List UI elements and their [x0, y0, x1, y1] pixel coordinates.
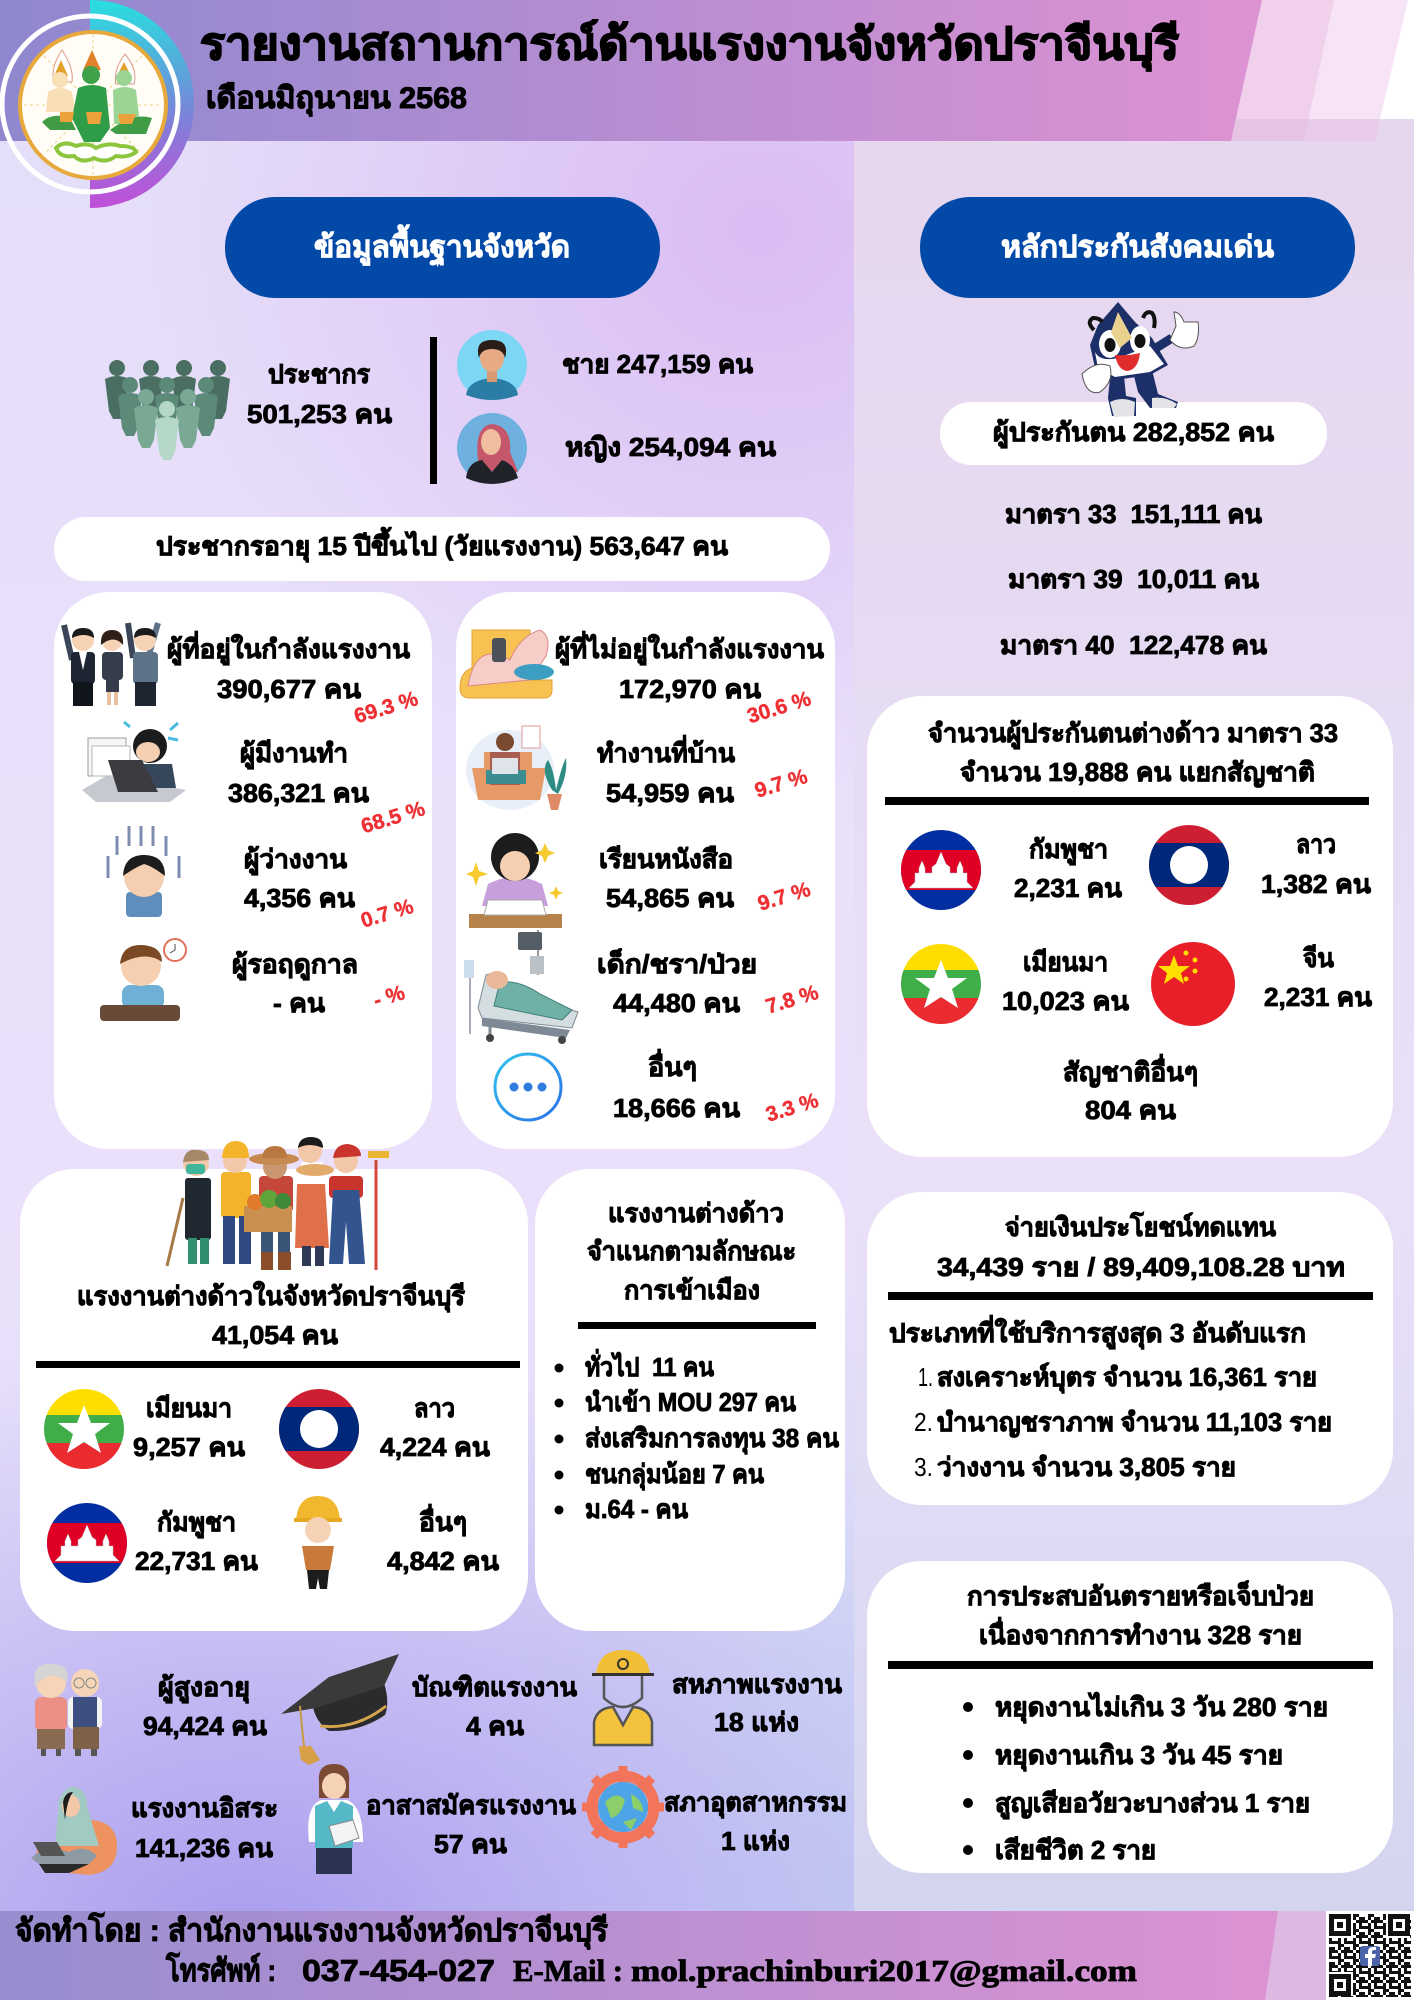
stat: labour unions: 18 แห่ง	[714, 1707, 799, 1737]
panel: compensation payouts	[867, 1192, 1393, 1505]
list: นำเข้า MOU 297 คน	[585, 1387, 796, 1417]
stat: Cambodia	[135, 1507, 258, 1576]
flag: Myanmar	[901, 944, 981, 1024]
stat: labour graduates: บัณฑิตแรงงาน	[412, 1672, 577, 1702]
stat: Laos	[1261, 829, 1371, 899]
panel: in the labour force	[54, 592, 432, 1149]
stat: outside labour force: 172,970 คน	[619, 674, 761, 704]
stat: studying	[599, 844, 734, 913]
panel: outside the labour force	[456, 592, 835, 1149]
flag: Myanmar	[44, 1389, 124, 1469]
injury list: หยุดงานไม่เกิน 3 วัน 280 ราย	[995, 1691, 1328, 1724]
population total: ประชากร	[268, 359, 370, 389]
right column background	[854, 119, 1414, 1911]
contact line: โทรศัพท์ :	[165, 1952, 276, 1988]
heading: การเข้าเมือง	[624, 1275, 760, 1305]
percent: 0.7 %	[358, 895, 416, 933]
flag: Laos	[1149, 825, 1229, 905]
stat: in labour force: ผู้ที่อยู่ในกำลังแรงงาน	[167, 630, 410, 666]
section statistics	[1000, 499, 1267, 660]
injury list	[963, 1691, 1328, 1865]
stat: child elderly sick	[597, 948, 757, 1018]
stat: unemployed: ผู้ว่างงาน	[244, 844, 347, 876]
panel: compensation payouts: จ่ายเงินประโยชน์ทดแทน	[1005, 1211, 1276, 1242]
stat: Laos: ลาว	[1296, 829, 1336, 859]
stat: labour graduates: 4 คน	[466, 1711, 524, 1741]
stat: labour unions	[672, 1669, 842, 1737]
stat: Cambodia: 22,731 คน	[135, 1546, 258, 1576]
QR code	[1326, 1911, 1414, 2000]
panel: insured migrants by nationality: จำนวนผู้ประกันตนต่างด้าว มาตรา 33	[928, 718, 1338, 750]
icon: working from home	[466, 726, 566, 810]
panel: work injuries	[867, 1561, 1393, 1873]
stat: Cambodia: 2,231 คน	[1014, 873, 1122, 903]
heading	[77, 1281, 465, 1350]
stat: Cambodia	[1014, 834, 1122, 903]
injury list: เสียชีวิต 2 ราย	[995, 1835, 1156, 1865]
population total	[247, 359, 392, 429]
stat: federation of industries: 1 แห่ง	[721, 1826, 790, 1856]
flag: Cambodia	[901, 830, 981, 910]
heading: จำแนกตามลักษณะ	[587, 1236, 796, 1266]
stat: employed	[228, 738, 369, 808]
stat: studying: 54,865 คน	[606, 883, 734, 913]
panel: social security insured pill	[940, 402, 1327, 465]
panel: migrants by entry type	[535, 1169, 845, 1631]
icon: freelancer on beanbag	[31, 1787, 117, 1875]
flag: Laos	[279, 1389, 359, 1469]
percent: - %	[371, 981, 408, 1012]
section heading pill: provincial data	[225, 197, 660, 298]
icon: three workers	[64, 623, 158, 706]
stat: elderly	[143, 1672, 267, 1741]
icon: gear and globe	[582, 1766, 664, 1848]
stat: seasonal: - คน	[273, 988, 325, 1018]
stat: other nationalities: 804 คน	[1085, 1095, 1176, 1125]
stat: labour volunteers: อาสาสมัครแรงงาน	[366, 1790, 576, 1820]
stat: working from home: 54,959 คน	[606, 778, 734, 808]
stat: others: 18,666 คน	[613, 1093, 740, 1123]
icon: graduation cap	[281, 1654, 399, 1765]
stat: Myanmar: เมียนมา	[146, 1393, 232, 1423]
ranked list: 3.	[914, 1452, 933, 1482]
stat: China: 2,231 คน	[1264, 982, 1372, 1012]
percent: 30.6 %	[744, 687, 814, 728]
stat: working from home	[597, 734, 735, 808]
injury list: หยุดงานเกิน 3 วัน 45 ราย	[995, 1740, 1283, 1772]
ranked list: สงเคราะห์บุตร จำนวน 16,361 ราย	[937, 1362, 1317, 1394]
icon: employed office worker	[82, 722, 186, 802]
panel: insured migrants by nationality: จำนวน 19,888 คน แยกสัญชาติ	[960, 757, 1315, 788]
heading: แรงงานต่างด้าว	[608, 1198, 784, 1228]
icon: elderly couple	[34, 1664, 102, 1756]
list: ทั่วไป 11 คน	[585, 1348, 714, 1382]
stat: Laos	[380, 1393, 490, 1462]
stat: unemployed	[244, 844, 355, 913]
percent: 7.8 %	[763, 981, 821, 1019]
stat: elderly: 94,424 คน	[143, 1711, 267, 1741]
icon: female avatar	[457, 413, 527, 484]
stat: other nationalities	[1063, 1053, 1198, 1125]
stat: other nationalities: สัญชาติอื่นๆ	[1063, 1053, 1198, 1088]
panel: compensation payouts: 34,439 ราย / 89,409,108.28 บาท	[937, 1252, 1345, 1282]
panel: compensation payouts: ประเภทที่ใช้บริการสูงสุด 3 อันดับแรก	[889, 1314, 1306, 1350]
stat: China: จีน	[1303, 943, 1334, 973]
section statistics: มาตรา 33 151,111 คน	[1005, 499, 1262, 529]
section heading pill: provincial data: ข้อมูลพื้นฐานจังหวัด	[314, 224, 570, 267]
percent: 9.7 %	[752, 765, 810, 803]
ranked list: 1.	[918, 1362, 933, 1392]
stat: labour volunteers: 57 คน	[434, 1829, 507, 1859]
stat: freelance workers: 141,236 คน	[135, 1833, 273, 1863]
icon: construction worker	[294, 1496, 342, 1589]
stat: labour graduates	[412, 1672, 577, 1741]
stat: others	[613, 1048, 740, 1123]
stat: China	[1264, 943, 1372, 1012]
stat: in labour force: 390,677 คน	[217, 674, 361, 704]
ranked list: บำนาญชราภาพ จำนวน 11,103 ราย	[937, 1407, 1332, 1438]
percent: 68.5 %	[358, 797, 428, 838]
icon: hospital bed	[464, 930, 578, 1044]
icon: union worker with helmet	[592, 1650, 654, 1745]
stat: employed: 386,321 คน	[228, 778, 369, 808]
panel: insured migrants by nationality	[867, 696, 1393, 1157]
icon: person on sofa	[460, 630, 554, 698]
stat: labour unions: สหภาพแรงงาน	[672, 1669, 842, 1699]
percent: 69.3 %	[351, 687, 421, 728]
working-age population pill: ประชากรอายุ 15 ปีขึ้นไป (วัยแรงงาน) 563,647 คน	[156, 526, 728, 563]
stat: Myanmar	[1002, 947, 1129, 1016]
contact line	[165, 1952, 1137, 1988]
ranked list	[914, 1362, 1332, 1482]
population total: 501,253 คน	[247, 399, 392, 429]
heading: แรงงานต่างด้าวในจังหวัดปราจีนบุรี	[77, 1281, 465, 1313]
stat: working from home: ทำงานที่บ้าน	[597, 734, 735, 768]
stat: employed: ผู้มีงานทำ	[240, 738, 348, 770]
panel: migrant workers by nationality	[20, 1169, 528, 1631]
stat: Laos: 1,382 คน	[1261, 869, 1371, 899]
logo: Ministry of Labour emblem	[2, 0, 194, 208]
contact line: E-Mail :	[513, 1953, 623, 1988]
icon: others dots	[495, 1054, 561, 1120]
stat: freelance workers	[131, 1793, 278, 1863]
panel: work injuries: เนื่องจากการทำงาน 328 ราย	[979, 1616, 1302, 1650]
stat: outside labour force	[555, 630, 824, 704]
stat: freelance workers: แรงงานอิสระ	[131, 1793, 278, 1823]
panel: work injuries: การประสบอันตรายหรือเจ็บป่วย	[967, 1580, 1314, 1611]
section statistics: มาตรา 40 122,478 คน	[1000, 630, 1267, 660]
stat: Laos: 4,224 คน	[380, 1432, 490, 1462]
section heading pill: social security	[920, 197, 1355, 298]
icon: unemployed person	[108, 826, 179, 917]
stat: Myanmar: 10,023 คน	[1002, 986, 1129, 1016]
male count: ชาย 247,159 คน	[562, 349, 753, 379]
stat: child elderly sick: เด็ก/ชรา/ป่วย	[597, 948, 757, 979]
organiser: จัดทำโดย : สำนักงานแรงงานจังหวัดปราจีนบุรี	[15, 1912, 608, 1950]
heading: 41,054 คน	[212, 1320, 338, 1350]
panel: social security insured pill: ผู้ประกันตน 282,852 คน	[993, 417, 1274, 449]
stat: others	[387, 1503, 499, 1576]
flag: Cambodia	[47, 1503, 127, 1583]
stat: Myanmar: 9,257 คน	[133, 1432, 245, 1462]
list	[554, 1348, 839, 1524]
list: ส่งเสริมการลงทุน 38 คน	[585, 1423, 839, 1455]
percent: 9.7 %	[755, 878, 813, 916]
percent: 3.3 %	[763, 1089, 821, 1127]
stat: child elderly sick: 44,480 คน	[613, 988, 740, 1018]
title: รายงานสถานการณ์ด้านแรงงานจังหวัดปราจีนบุรี	[200, 19, 1179, 72]
stat: elderly: ผู้สูงอายุ	[158, 1672, 250, 1704]
section heading pill: social security: หลักประกันสังคมเด่น	[1001, 231, 1274, 264]
flag: China	[1151, 942, 1235, 1026]
header banner	[0, 0, 1414, 141]
stat: seasonal	[232, 949, 358, 1018]
stat: labour volunteers	[366, 1790, 576, 1859]
stat: Myanmar: เมียนมา	[1023, 947, 1108, 977]
icon: student	[466, 833, 563, 928]
icon: labour volunteer	[308, 1764, 363, 1874]
working-age population pill	[54, 517, 830, 581]
stat: others: 4,842 คน	[387, 1546, 499, 1576]
stat: Cambodia: กัมพูชา	[157, 1507, 236, 1539]
stat: Myanmar	[133, 1393, 245, 1462]
contact line: 037-454-027	[302, 1953, 495, 1988]
stat: others: อื่นๆ	[419, 1503, 467, 1537]
icon: social security mascot	[1082, 302, 1198, 417]
section statistics: มาตรา 39 10,011 คน	[1008, 564, 1259, 594]
stat: seasonal: ผู้รอฤดูกาล	[232, 949, 358, 981]
list: ชนกลุ่มน้อย 7 คน	[585, 1459, 764, 1491]
female count: หญิง 254,094 คน	[565, 432, 776, 463]
icon: crowd	[105, 360, 230, 460]
icon: waiting person with clock	[100, 939, 186, 1021]
icon: group of workers	[167, 1137, 389, 1270]
icon: male avatar	[457, 330, 527, 400]
contact line: mol.prachinburi2017@gmail.com	[631, 1953, 1137, 1988]
stat: unemployed: 4,356 คน	[244, 883, 355, 913]
list: ม.64 - คน	[585, 1494, 688, 1524]
stat: Laos: ลาว	[414, 1393, 455, 1423]
stat: Cambodia: กัมพูชา	[1029, 834, 1108, 866]
stat: outside labour force: ผู้ที่ไม่อยู่ในกำลังแรงงาน	[555, 630, 824, 666]
ranked list: ว่างงาน จำนวน 3,805 ราย	[937, 1452, 1236, 1482]
stat: in labour force	[167, 630, 410, 704]
heading	[587, 1198, 796, 1305]
injury list: สูญเสียอวัยวะบางส่วน 1 ราย	[995, 1788, 1310, 1820]
stat: federation of industries: สภาอุตสาหกรรม	[664, 1787, 847, 1819]
ranked list: 2.	[914, 1407, 933, 1437]
subtitle: เดือนมิถุนายน 2568	[206, 82, 467, 117]
stat: studying: เรียนหนังสือ	[599, 844, 733, 874]
stat: federation of industries	[664, 1787, 847, 1856]
footer	[0, 1911, 1414, 2000]
stat: others: อื่นๆ	[648, 1048, 697, 1082]
